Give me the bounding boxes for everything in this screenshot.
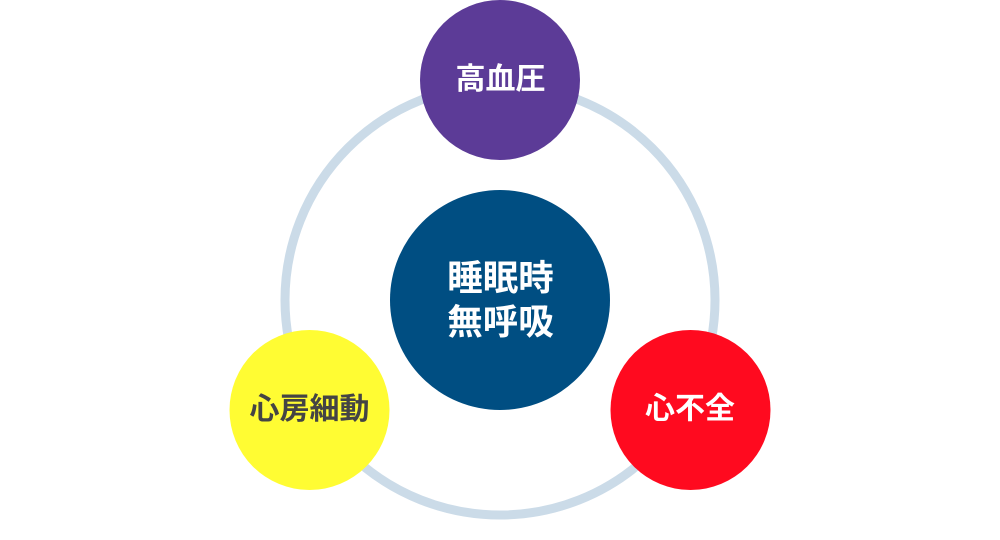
top circle: hypertension: [420, 0, 580, 160]
center circle: sleep apnea: 無呼吸: [447, 302, 554, 342]
lower right circle: heart failure: 心不全: [645, 392, 735, 426]
lower left circle: atrial fibrillation: 心房細動: [250, 393, 370, 426]
connecting ring: [285, 85, 715, 515]
lower left circle: atrial fibrillation: [230, 330, 390, 490]
center circle: sleep apnea: [390, 190, 610, 410]
top circle: hypertension: 高血圧: [456, 63, 546, 96]
center circle: sleep apnea: 睡眠時: [447, 258, 554, 298]
lower right circle: heart failure: [610, 330, 770, 490]
